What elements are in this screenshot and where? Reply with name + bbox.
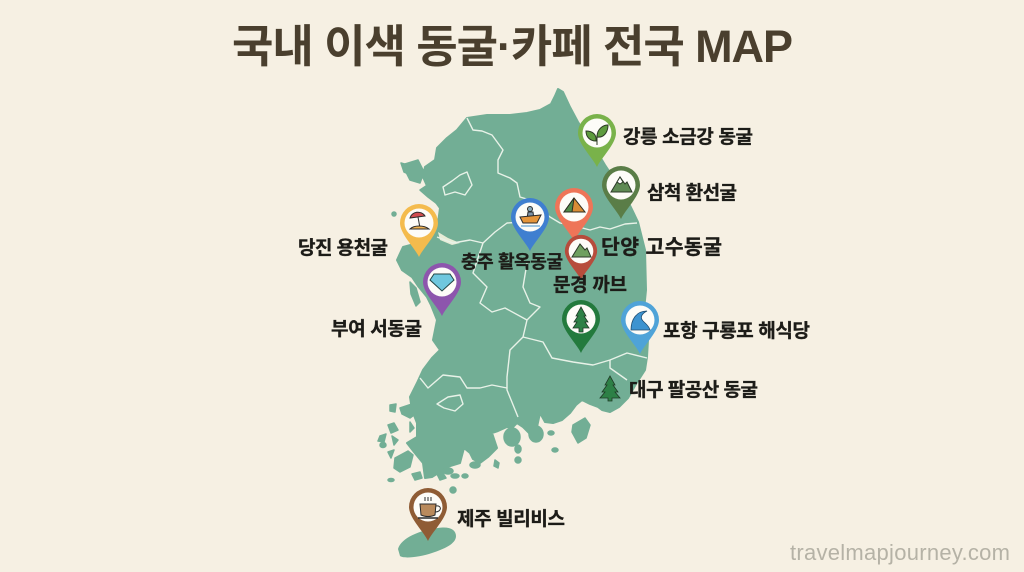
label: 제주: 제주 빌리비스 [457,508,565,530]
pin: 제주 빌리비스 [409,488,447,541]
label: 부여: 부여 서동굴 [331,318,422,340]
label: 강릉: 강릉 소금강 동굴 [623,126,753,148]
mainland [397,89,648,478]
icon: wave [631,311,650,330]
icon: tent [564,198,585,212]
title: 국내 이색 동굴·카페 전국 MAP [232,21,793,72]
icon: 대구 팔공산 tree [600,376,620,401]
label: 삼척: 삼척 환선굴 [647,182,737,204]
map of South Korea [378,89,648,557]
icon: pine tree [573,307,589,332]
pin: 텐트 [555,188,593,241]
bay inlet [438,232,460,245]
icon: leaf [586,125,608,145]
icon: mountain [611,177,632,192]
label: 포항: 포항 구룡포 해식당 [663,320,810,342]
labels [298,126,810,530]
icon: coffee cup [418,497,440,518]
label: 대구: 대구 팔공산 동굴 [629,379,758,401]
icon: diamond [430,274,454,291]
pin: 충주 활옥동굴 [511,198,549,251]
icon: beach [410,212,429,229]
label: 당진: 당진 용천굴 [298,237,388,259]
pin: 문경 까브 [565,235,597,280]
label: 충주: 충주 활옥동굴 [461,252,563,272]
province borders [420,118,647,417]
pin: 부여 서동굴 [423,263,461,316]
pin: 대구 숲 [562,300,600,353]
west coast islands [378,160,590,493]
watermark: travelmapjourney.com [790,540,1010,565]
pin: 당진 용천굴 [400,204,438,257]
icon: kayak [520,206,541,226]
pin: 강릉 소금강 동굴 [578,114,616,167]
label: 문경: 문경 까브 [553,274,627,296]
pin: 포항 구룡포 해식당 [621,301,659,354]
label: 단양: 단양 고수동굴 [601,236,722,259]
jeju island [398,527,456,557]
pin: 삼척 환선굴 [602,166,640,219]
icon: mountain [572,244,591,257]
